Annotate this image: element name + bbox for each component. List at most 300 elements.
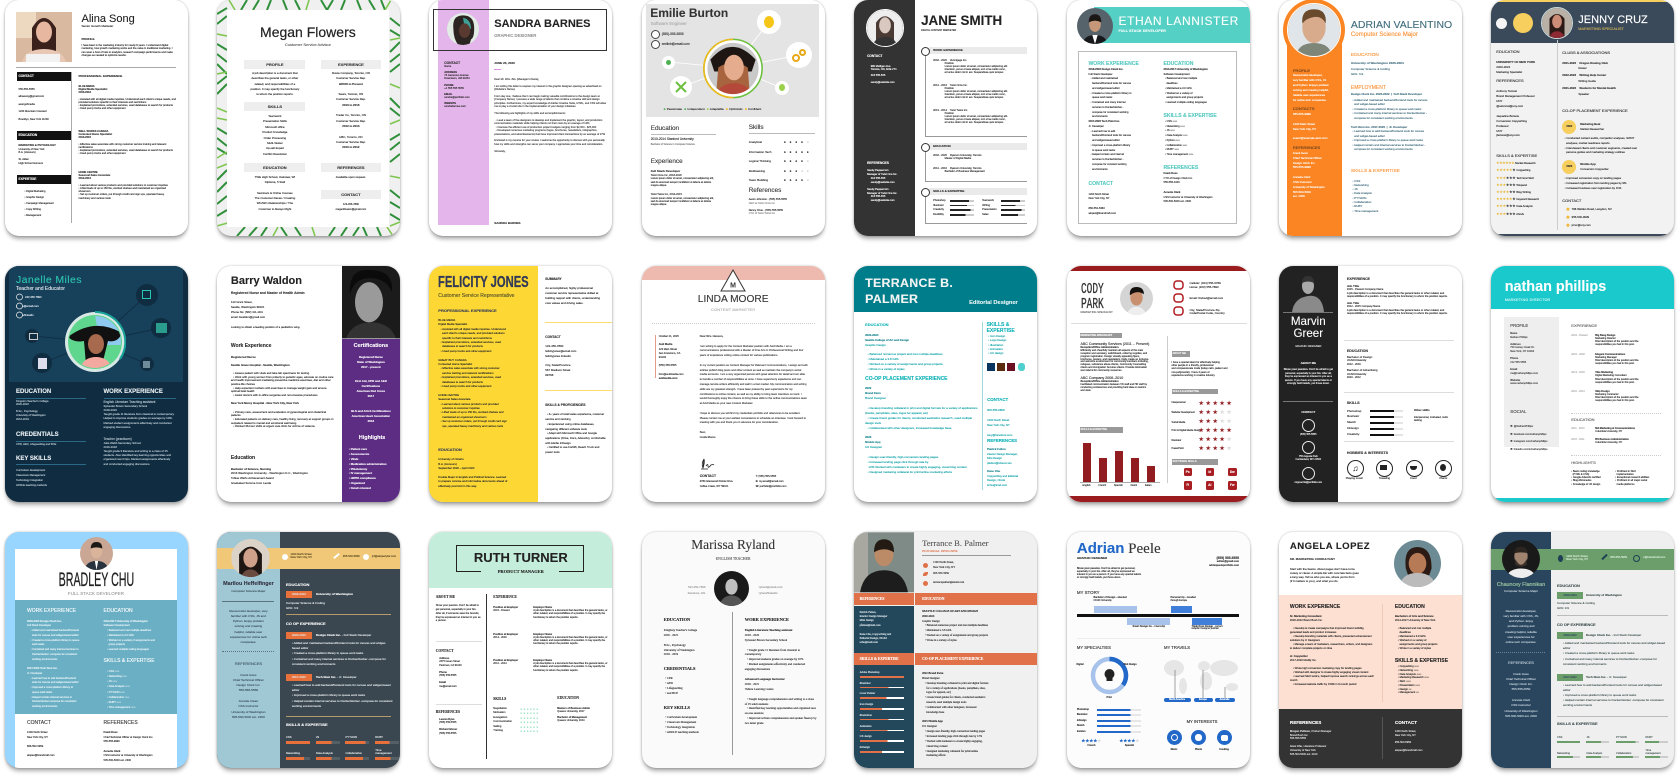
key skills: ADDLE teaching methods [16,484,47,487]
contact: New York City, NY [27,736,48,739]
about text: non-judgmental). I have 3 years of [1172,371,1209,374]
skills: • Icon Design [988,334,1005,338]
highlights: • Proficient in SEO [1615,470,1636,472]
name: CODY [1080,281,1103,298]
tag: about me [1172,351,1190,356]
education [286,582,391,614]
panel: Felicity Jones resume [429,266,612,502]
skill bars: InDesign [1347,426,1359,430]
education: • Maintained a 3.0 GPA [1165,87,1192,90]
panel: Ruth Turner resume [429,532,612,768]
work experience: • Identified key learning opportunities and organized new on-one sessions [745,706,816,715]
rule two [1344,390,1454,393]
about me: ABOUT ME [436,595,455,599]
section bar: expertise [16,175,70,184]
clubs: Speaker [1578,92,1589,96]
contact: alopez@brandcraft.com [1088,212,1116,215]
skills [493,697,553,737]
references: REFERENCES [235,661,262,666]
experience: Lorem ipsum dolor sit amet, consectetur adipiscing elit, sed do eiusmod tempor incididunt ut labore et dolore magna aliqua [651,197,714,206]
contact text: Seattle, Washington 98101 [231,305,264,309]
work experience: Docker/docker-compose for consistent [32,700,76,703]
phone and email: (555) 555-5555 [1216,556,1239,560]
skills: SKILLS & EXPERTISE [104,658,155,664]
co-op experience: 2023 [865,435,871,439]
co-op text: UX Designer [922,725,937,728]
skills: • Certified to use Forklift, Reach Truck and power tools [545,445,599,454]
contact text: Email: findout@email.com [1190,296,1223,300]
band: education [915,593,1037,605]
name: ANGELA LOPEZ [1290,541,1370,552]
section bar: education [16,131,70,140]
band contact items: c@brandcraft.com [1643,556,1665,559]
letter date: JUNE 25, 2020 [494,61,515,65]
education: Graphic Design [865,343,886,347]
title: EDITORIAL DESIGNER [922,548,958,552]
co-op text: visual blog content [926,745,948,748]
professional experience: • Effective sales associate with strong customer [441,366,500,370]
work experience: Registered Nurse [231,355,256,359]
about me: Show your passion. Don't be afraid to get personal, especially in your bio. After all, if someone sees the bounds, they've expressed an interest in you as a person. [436,604,481,622]
education text [922,610,1030,644]
certifications [342,343,400,424]
contact: 866-552-5959 [27,745,43,748]
section: work experience: Interdum, purus ornare aliquet, orci urna mattis nunc, [945,118,1006,121]
education [1395,604,1437,651]
profile details: Name [1510,332,1517,335]
skills bars: Data Analysis [1586,752,1602,754]
education details: B.A. (Honours) [18,151,36,154]
experience: A job description is a document that describes the general tasks or other related, and responsibilities of a position. It may specify the functionary to whom the position reports. [1347,309,1448,315]
work experience [745,617,817,726]
education text: Customer is Always Right [258,207,291,211]
my story heading: MY STORY [1077,590,1100,594]
skills bars: Data Analysis [316,751,333,755]
work experience: • Helped contain and internal [1091,153,1124,156]
sidebar contact: EMAIL [444,93,452,96]
experience list: 2018 - Present [1571,334,1588,337]
skills: SKILLS & EXPERTISE [1395,658,1448,664]
experience: A job description is a document that describes the general tasks, or other related, and responsibilities of a position. It may specify the functionary to whom the position reports. [533,636,608,645]
software icons [1184,468,1240,490]
name: Terrance B. Palmer [922,538,989,548]
clubs: CLUBS & ASSOCIATIONS [1562,50,1610,55]
work experience: 2018 - 2020 [745,633,759,637]
sidebar contact [444,61,470,108]
intro: cutesy or clever. A simple bio with concrete facts goes [1290,570,1359,574]
job title: MARKETING SPECIALIST [1578,26,1624,30]
panel: Angela Lopez resume [1279,532,1462,768]
tag: skills expertise: SKILLS & EXPERTISE [1172,390,1199,392]
work experience: Jr. Developer [1088,125,1104,128]
skills bars: Time [375,748,381,752]
hobbies heading: HOBBIES & INTERESTS [1347,450,1388,454]
skills list: Multi-Tasker [267,141,283,145]
skills: • JS ••••• [107,680,117,683]
skills: • RUBY [1352,204,1362,208]
portrait [714,570,749,606]
interest icons: Plants [1195,748,1202,750]
skills: ●●●●●● [520,711,540,715]
name: BRADLEY CHU [58,570,134,591]
references: Interior Design Manager, [987,452,1018,456]
skills: • Networking ••••• [1398,669,1418,672]
highlights: • Basic coding knowledge [1571,470,1600,472]
contact [27,720,55,759]
rule two [1557,714,1668,717]
education: September 2020 – April 2022 [438,466,475,470]
skills: • Time management ••••• [107,706,135,709]
professional experience: • Assisted with all digital media inquiries. Understood [441,327,506,331]
work experience: 2018-2020 [104,408,117,412]
skill bars: InDesign [860,746,870,749]
education: • Learned multiple coding languages [107,648,149,651]
star ratings: Website Development [1172,411,1195,414]
references [436,710,460,735]
work experience: • Learned SEO tactics, helped improve search rankings across each month [1290,675,1374,682]
co-op experience: • Learned how to add backend/frontend tools for canvas and widget-based editor [292,683,391,692]
education [104,608,155,653]
sidebar text: for online tech companies. [1293,98,1327,102]
references: Design Clock Inc. [236,683,260,687]
experience: A job description is a document that describes the general tasks, or other related, and responsibilities of a position. It may specify the functionary to whom the position reports. [533,662,608,672]
hobby icons: Food [1410,476,1417,480]
contact: tony@foredrust.com [987,433,1012,437]
education and references: REFERENCES [1496,78,1524,83]
references: Anne Chu, Literature Professor [1290,745,1326,748]
education: • Maintained a 3.0 GPA [107,634,134,637]
education: University of Washington [1586,592,1622,596]
highlights [1571,461,1666,495]
references: 555-555-0550 [1512,687,1530,691]
heading: skills [244,102,305,111]
profile details: Phone [1510,357,1518,360]
about text: and compassionate mode (today calm, patient and [1172,367,1228,370]
skills: ●●●●●● [520,720,540,724]
work experience: • Manage a team of marketers, researchers, writers, and designers to deliver complete projects on time [1290,643,1372,650]
panel: Adrian Valentino resume [1279,0,1462,236]
social [1510,408,1548,454]
work experience: • Taught grade 11 literature from classical to contemporary [745,648,800,656]
rule two [436,702,482,705]
references: Annette Clark [104,750,120,753]
band: skills [854,653,914,665]
contact right: E: my.email@email.com [756,480,784,483]
co-op experience: • Added and maintained backend/frontend tools for canvas and widget-based editor [292,641,386,650]
band contact items [279,552,399,564]
skills: • Data Analysis [1352,191,1372,195]
experience: Lorem ipsum dolor sit amet, consectetur adipiscing elit, sed do eiusmod tempor incididunt ut labore et dolore magna aliqua [651,177,714,187]
experience text: 2012 to 2013 [342,124,359,128]
sidebar contact: sandy@website.com [871,81,895,84]
references: REFERENCES [987,438,1017,442]
references: REFERENCES [1508,661,1534,665]
education [1347,350,1378,379]
work experience: compose for constant working [1092,163,1127,166]
skills: • CSS ••••• [107,670,119,673]
education: MA Marketing & Communications [1595,427,1635,430]
skills: • Logo Design [988,338,1006,342]
panel: Ethan Lannister resume [1066,0,1250,236]
name: JENNY CRUZ [1578,14,1648,26]
software icons [987,362,1027,372]
sidebar text: CSS Instructor [1293,180,1312,184]
experience: Employer Name [533,632,552,636]
sidebar text: very familiar with CSS, JS [1293,78,1326,82]
work experience [27,608,79,710]
skills: Evangelism [493,716,507,719]
references: Annette Clark [1164,191,1180,194]
tag: marketing specialist [1080,332,1122,338]
date accent [494,68,501,71]
portrait with ring [703,38,763,98]
education text: The Customer Raves / Creating [255,196,295,200]
skills: • Illustration [988,343,1003,347]
co-op experience: • Develop branding collateral in print and digital formats for a variety of applications (books, pamphlets, sites, logos for apparel, etc) [865,406,978,415]
name: TERRANCE B. [865,276,953,290]
education: University of Washington [16,414,46,417]
references: 505-500-5000 ext. 2300 [1164,200,1191,203]
sidebar text: 1200 Main Street [1293,122,1315,126]
work experience: tools for canvas and widget-based editor [32,634,79,637]
education text: 2020-2024 [922,615,934,618]
education and references: EDUCATION [1496,49,1520,54]
education: 2020 - 2022 [664,633,678,637]
name: PARK [1080,296,1103,313]
contact text [1190,282,1225,316]
experience: A job description is a document that describes the general tasks or other related, and responsibilities of a position. It may specify the functionary to whom the position reports. [1347,292,1448,298]
education: EDUCATION [865,322,889,327]
teal banner [1094,7,1250,43]
experience text: Customer Service Rep. [336,76,366,80]
skill bars: Adobe Photoshop [860,671,880,674]
education: GPA: 3.9 [286,606,298,610]
co-op text: 2022 Brand Farm [922,672,943,675]
work experience: • Helped contain internal services to [31,696,72,698]
work experience: • Improved written comprehension and spoken fluency by two letter grade [745,716,817,725]
profile text [250,71,300,96]
sender details: San Francisco, CA [659,352,680,355]
contact details: 555-555-5555 [18,88,35,91]
job title: CONTENT MARKETER [711,306,755,312]
co-op text: • Collaborated with other designers, increased [925,706,976,709]
highlights: implementation [1617,473,1634,476]
portrait [1077,8,1113,44]
contact text: Looking to obtain a leading position of a pediatrics wing. [231,325,300,329]
experience: Employer Name [533,606,552,609]
experience list: Brief description of the position and the [1595,396,1639,399]
contact items [1279,418,1338,488]
contact left [662,584,705,596]
professional experience: • Learned about various products and provided [441,402,499,406]
skill bars: Animation [860,724,872,728]
software bars [1077,708,1142,736]
certifications: 2018 [368,419,374,423]
education text: Seminars & Online Courses [257,191,293,195]
work experience: 2017-2022 Tech Point Inc. [1088,120,1120,123]
key skills: Curriculum development [16,469,45,472]
contact right [756,474,786,490]
profile details: me@nathanphillips.com [1510,372,1538,375]
contact rows: JMiles/linkedIn [16,314,34,317]
sidebar contact: PHONE [444,84,454,87]
professional experience: solutions to customer inquiries [442,406,480,410]
skills [1395,658,1448,695]
job title: Registered Nurse and Master of Health Admin [231,291,305,295]
summary: companies. [240,640,256,644]
education: 2016 - 2019 [664,652,678,656]
job: Blue Media: • Assisted with all digital media inquiries. Understood each client's unique needs, and provided solutions specific to their interests and restrictions [78,98,176,104]
experience text: Sears, Toronto, ON [339,92,363,96]
profile [82,36,173,57]
work experience: • Help expectant mothers with exercises to manage weight gain and ensure optimal fetal health [231,386,327,393]
co-op experience: Design Clock Inc. - Full Stack Developer [316,632,371,636]
education [865,323,977,372]
contact: alopez@brandcraft.com [27,754,55,757]
work experience [104,389,176,466]
rule three [1344,440,1454,442]
experience heading: EXPERIENCE [1571,322,1597,328]
tag: marketing specialist: MARKETING SPECIALIST [1080,334,1112,336]
co-op experience: UX Designer [865,445,882,449]
work experience: • Learned how to add [1091,130,1115,132]
work experience: • Develop branding materials with clients, presented enhancement solutions by Jr Designers [1290,635,1372,642]
skills: ●●●●● [784,168,812,172]
section bar: contact: CONTACT [18,74,34,78]
work experience: • Contained and many internal services to [31,648,79,651]
work experience [1290,604,1375,687]
education: • Worked on a variety of [1398,639,1426,642]
divider [1070,322,1246,325]
inner white sheet [227,10,389,227]
column rule [1381,604,1384,702]
experience list: Marketing Manager [1595,356,1617,359]
section: work experience: WORK EXPERIENCE [933,48,963,52]
center rule [731,612,733,755]
education: UCAD/University [1347,373,1366,376]
phone and email: adrianpeeleportfolio.com [1209,564,1239,567]
skill bars: UX design [860,735,872,738]
contact: 605-555-0808 [987,408,1005,412]
education: University of Washington 2020-2024 [1351,61,1404,65]
contact: terrancepalmer@email.com [933,581,964,584]
about text: I have a special talent for effectively helping [1172,361,1220,364]
dotted rule [222,651,274,652]
timeline: Triple Dove Design - current [1192,624,1223,628]
contact text: 123-456-7890 [343,203,359,206]
education text: SEATTLE COLLEGE OF ART AND DESIGN [922,610,978,613]
highlights: • Medication administration [349,462,387,466]
profile: I have been in the marketing industry for nearly 8 years. I understand digital marketing, how growth marketing works and the value in traditional marketing. I can wear a host of hats in analytics, research campaign performance and make changes as needed to optimize results. [82,44,173,57]
co-op experience: Brand Designer [865,396,886,400]
skills: ●●●●●● [520,729,540,733]
portrait ring [1283,0,1345,61]
contact: CONTACT [1562,198,1581,203]
experience list: responsibilities you had in this post. [1595,343,1635,346]
portrait [1292,274,1324,312]
sender details: linm@avidmedia.com [659,373,684,376]
navy left column [1491,532,1551,768]
education: 2018-2024 [292,592,306,596]
bottom accent [1491,498,1674,502]
education: Queens University, 2017 [557,710,584,713]
education: 2011 - 2013 [1571,427,1584,430]
co-op text: • Create brand guides for clients, conducted aesthetics [925,696,985,699]
experience text: HBC, Toronto, ON [339,135,363,139]
name [865,276,953,307]
education: EDUCATION [438,447,462,452]
expertise list: • Campaign Management [24,202,54,205]
co-op experience: 2020-2022 [1563,632,1577,636]
section: education: Bachelor of Business Management [945,170,985,173]
skills: • Collaboration ••••• [107,696,129,699]
green contact band [1491,549,1674,570]
co-op 2022 text: persona guides and marketing strategy outlines [1566,150,1625,154]
tag: skills [1080,427,1122,432]
skills: Communication [493,720,512,723]
contact: 1200 North Street [27,731,47,734]
professional experience: • Set up customer orders, put through credit card sign [441,419,507,423]
education: Bachelors of Arts and Science [1395,615,1434,618]
light left column [217,532,280,768]
name [1279,316,1338,339]
co-op text: knowledge base [926,711,944,714]
contact details: asongofmedia [18,103,35,106]
sidebar text: Resourceful developer, [1293,73,1322,77]
work experience: Taught grade 11 literature from classical to contemporary. Helped to improve students grades on average by 10%. Marked student assignments effectively and conducted engaging discussions. [104,412,174,429]
references: Aaron Johnston - (555) 555-5555 [749,198,787,201]
education: BS Business Administration [1595,438,1629,441]
education and references: UNY [1496,99,1502,103]
profile details: Email [1510,368,1517,371]
contact [1395,719,1422,753]
portrait [1541,7,1573,39]
bio: especially in your bio. After all, they've expressed an [1077,570,1135,573]
co-op experience: 2022 [865,386,871,390]
certifications: Certifications [354,343,388,349]
contact rows: (555)-555-5555 [662,32,684,36]
work experience: • Assist doctors with in-office surgeries and non-invasive procedures [233,393,317,397]
experience list: 2014 - 2016 [1571,371,1585,374]
education underline [16,397,86,400]
panel: Terrance B. Palmer orange resume [854,532,1037,768]
co-op experience: • Collaborated with other designers, increased knowledge base [868,426,951,430]
references [987,438,1018,487]
sidebar text: aventr@example-tech.com [1293,136,1327,140]
work experience: 2016 - 2022 [745,682,759,686]
highlights: • Vitals [349,457,358,461]
education: Bachelor of Design [1347,355,1372,359]
employment: • Helped contain and internal services to Docker/docker - [1352,142,1425,146]
work experience: • Primary care, assessment and evaluation of gynecological and obstetrical patients [231,410,326,417]
work experience: queue work tasks [32,691,52,694]
hobby icons: ♫ [1352,464,1358,473]
contact: Parkman, CA 91040 [439,664,462,666]
profile details: Website [1510,379,1520,382]
certifications: 2017 [368,394,374,398]
sidebar rule [1496,652,1545,653]
connectors [4,266,188,382]
section: skills chart: Teamwork [982,199,994,202]
experience text: Customer Service Rep. [336,119,366,123]
section: skills chart: Illustrator [933,204,944,207]
skills bars: CSS [286,734,292,738]
sidebar references: Sandy Peppercorn [867,169,889,172]
highlights: • Knowledge of UX design [1571,483,1600,486]
co-op experience: • Learned how to add backend/frontend tools for canvas and widget-based editor [1563,682,1662,692]
education and references: jbotsow@uny.com [1496,133,1520,137]
co-op experience: Nimble App [865,440,881,444]
